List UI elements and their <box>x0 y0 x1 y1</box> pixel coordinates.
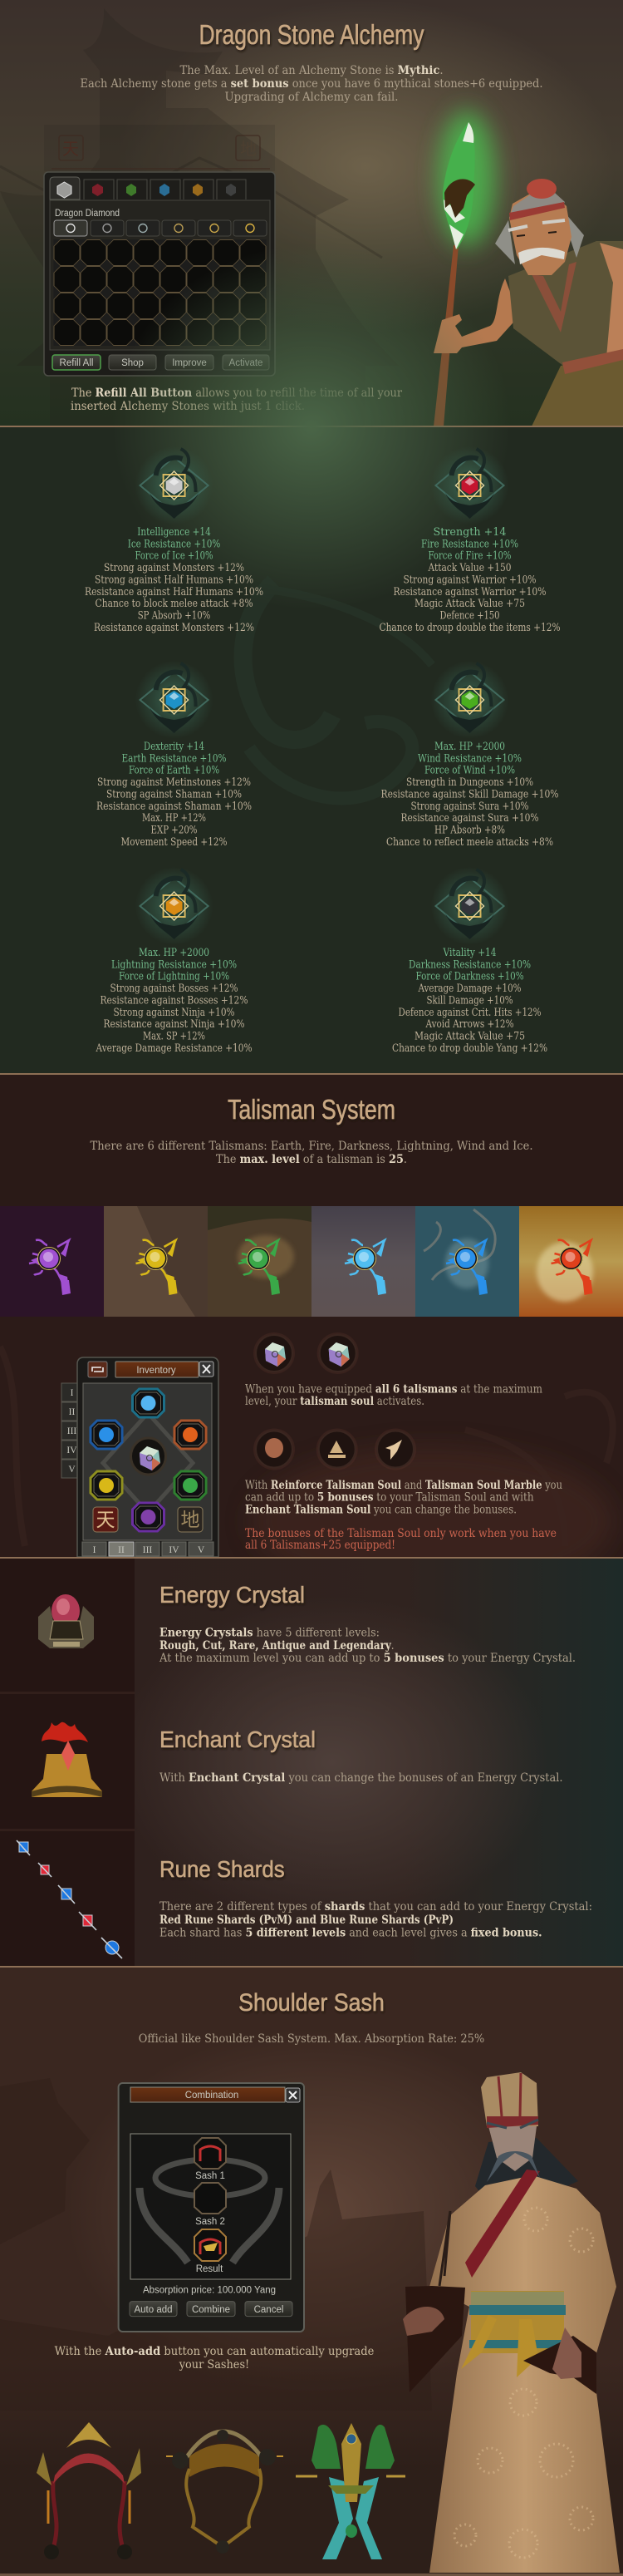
intro text: Each Alchemy stone gets a set bonus once you have 6 mythical stones+6 equipped. <box>80 77 543 91</box>
icon: green stone bonuses: Force of Wind +10% <box>424 764 515 776</box>
icon: black stone bonuses: Average Damage +10% <box>418 982 522 994</box>
energy crystal text: Energy Crystals have 5 different levels: <box>159 1626 380 1639</box>
talisman: ice <box>345 1240 386 1295</box>
icon: amber stone bonuses: Strong against Bosses +12% <box>110 982 238 994</box>
icon: black stone bonuses <box>392 867 547 1054</box>
reinforce text: With Reinforce Talisman Soul and Talisman Soul Marble you <box>245 1479 562 1492</box>
icon: green stone bonuses: Strong against Sura +10% <box>410 800 529 812</box>
icon: amber stone bonuses: Lightning Resistance +10% <box>111 958 237 970</box>
divider <box>0 1073 623 1075</box>
icon: amber stone bonuses: Strong against Ninja +10% <box>113 1006 235 1018</box>
icon: blue stone bonuses: Dexterity +14 <box>144 740 204 752</box>
icon: amber stone bonuses: Resistance against Ninja +10% <box>103 1017 245 1030</box>
alchemy window <box>44 125 275 376</box>
enchant text: With Enchant Crystal you can change the bonuses of an Energy Crystal. <box>159 1771 563 1785</box>
window buttons: Refill All <box>60 358 93 368</box>
icon: black stone bonuses: Vitality +14 <box>443 946 497 958</box>
icon: white stone bonuses: Strong against Half Humans +10% <box>95 574 253 585</box>
icon: red stone bonuses: Resistance against Warrior +10% <box>394 585 547 598</box>
refill text <box>71 387 403 413</box>
icon: energy crystal <box>38 1594 94 1648</box>
divider <box>0 1966 623 1968</box>
icon: red stone bonuses: Magic Attack Value +75 <box>415 597 525 609</box>
rune shards text <box>159 1900 592 1940</box>
window buttons: Improve <box>172 358 207 368</box>
stone name: Dragon Diamond <box>55 209 120 219</box>
price: Absorption price: 100.000 Yang <box>143 2286 276 2296</box>
character: old man with spear <box>434 111 623 426</box>
reinforce item icons <box>253 1428 416 1470</box>
title: Rune Shards <box>159 1856 285 1882</box>
icon: green stone bonuses: Resistance against Skill Damage +10% <box>380 788 559 800</box>
talisman strip <box>0 1206 623 1317</box>
window buttons: Cancel <box>254 2305 283 2315</box>
equipped talisman slots <box>91 1389 206 1532</box>
rune shards text: Red Rune Shards (PvM) and Blue Rune Shards (PvP) <box>159 1914 454 1927</box>
pagoda background <box>0 8 399 426</box>
combination window: Sash 1 <box>195 2171 225 2181</box>
icon: amber stone bonuses: Force of Lightning +10% <box>119 970 229 983</box>
side tabs: I <box>71 1388 74 1398</box>
combination window: Result <box>196 2264 223 2274</box>
soul text: level, your talisman soul activates. <box>245 1395 424 1408</box>
bottom tabs: V <box>198 1545 205 1555</box>
panel: talisman system <box>0 1075 623 1596</box>
reinforce text <box>245 1479 562 1516</box>
icon: white stone bonuses: Resistance against Monsters +12% <box>94 621 254 633</box>
icon: red stone bonuses: Fire Resistance +10% <box>421 537 518 549</box>
title: Enchant Crystal <box>159 1726 316 1752</box>
inventory window <box>61 1357 218 1557</box>
icon: black stone bonuses: Darkness Resistance +10% <box>409 958 531 970</box>
icon: white stone bonuses: Strong against Monsters +12% <box>104 561 244 574</box>
icon: green stone bonuses: Chance to reflect meele attacks +8% <box>386 835 553 848</box>
intro text: Official like Shoulder Sash System. Max. Absorption Rate: 25% <box>139 2032 484 2046</box>
title: Dragon Stone Alchemy <box>199 19 424 50</box>
icon: green stone bonuses: Wind Resistance +10% <box>418 751 522 764</box>
icon: green stone bonuses: Resistance against Sura +10% <box>400 811 539 824</box>
auto-add text: your Sashes! <box>179 2358 249 2372</box>
icon: amber stone bonuses <box>96 867 253 1054</box>
divider <box>0 1557 623 1559</box>
faint dragon <box>243 582 432 798</box>
icon: white stone bonuses: SP Absorb +10% <box>138 609 210 622</box>
window buttons <box>130 2302 292 2317</box>
rune shards text: There are 2 different types of shards that you can add to your Energy Crystal: <box>159 1900 592 1914</box>
icon: blue stone bonuses: Force of Earth +10% <box>129 764 219 776</box>
soul text <box>245 1383 542 1408</box>
icon: amber stone bonuses: Resistance against Bosses +12% <box>100 994 248 1006</box>
icon: red stone bonuses: Force of Fire +10% <box>429 549 512 562</box>
icon: red stone bonuses: Strong against Warrior +10% <box>404 574 537 585</box>
robe pattern spots <box>454 2208 593 2558</box>
wing emblem <box>140 2160 279 2263</box>
icon: blue stone bonuses: EXP +20% <box>151 824 198 836</box>
faded seal icons <box>52 135 270 169</box>
icon: rune shards <box>17 1840 122 1958</box>
icon: green stone bonuses: Strength in Dungeons +10% <box>406 776 533 788</box>
icon: green stone bonuses: HP Absorb +8% <box>434 824 505 836</box>
side tabs <box>61 1383 83 1478</box>
character: robed man <box>403 2072 620 2573</box>
combination window: Sash 2 <box>195 2217 225 2227</box>
equipped talisman slots: 天 <box>96 1504 115 1532</box>
icon: enchant crystal <box>32 1722 102 1797</box>
talisman soul icons <box>253 1332 359 1374</box>
icon: white stone bonuses: Intelligence +14 <box>137 525 211 538</box>
energy crystal text: Rough, Cut, Rare, Antique and Legendary. <box>159 1639 395 1652</box>
sash: teal and green <box>296 2423 405 2559</box>
grade buttons <box>54 220 267 236</box>
icon: white stone bonuses: Resistance against Half Humans +10% <box>85 585 263 598</box>
icon: blue stone bonuses: Strong against Shaman +10% <box>106 788 242 800</box>
intro text: There are 6 different Talismans: Earth, Fire, Darkness, Lightning, Wind and Ice. <box>90 1140 533 1153</box>
talisman: wind <box>238 1240 280 1295</box>
castle silhouette <box>0 2078 432 2411</box>
icon: white stone bonuses: Ice Resistance +10% <box>128 537 220 549</box>
bottom tabs: IV <box>169 1545 179 1555</box>
window buttons <box>52 355 269 370</box>
intro text <box>80 64 543 104</box>
icon: red stone bonuses: Attack Value +150 <box>428 561 512 574</box>
alchemy window: 地 <box>240 135 257 160</box>
title bar <box>130 2087 300 2102</box>
energy crystal text <box>159 1626 576 1665</box>
warning text: The bonuses of the Talisman Soul only work when you have <box>245 1527 557 1540</box>
title: Talisman System <box>228 1094 395 1125</box>
icon: red stone bonuses: Chance to droup double the items +12% <box>379 621 561 633</box>
bottom tabs: I <box>93 1545 96 1555</box>
title bar <box>88 1362 213 1377</box>
bottom tabs: III <box>143 1545 152 1555</box>
intro text: Upgrading of Alchemy can fail. <box>224 91 399 104</box>
icon: black stone bonuses: Defence against Crit. Hits +12% <box>399 1006 542 1018</box>
side tabs: V <box>68 1465 76 1475</box>
alchemy window: 天 <box>62 135 79 160</box>
icon: blue stone bonuses: Earth Resistance +10% <box>121 751 227 764</box>
bottom tabs <box>82 1542 213 1556</box>
bottom tabs: II <box>118 1545 125 1555</box>
auto-add text: With the Auto-add button you can automatically upgrade <box>55 2345 374 2358</box>
icon: red stone bonuses: Strength +14 <box>434 525 507 538</box>
side tabs: II <box>69 1407 75 1417</box>
panel: alchemy stone bonuses <box>0 244 623 1074</box>
icon: white stone bonuses <box>85 446 263 633</box>
talisman: lightning <box>446 1240 488 1295</box>
icon: blue stone bonuses <box>96 661 252 848</box>
warning text <box>245 1527 557 1552</box>
sash: red <box>37 2422 141 2559</box>
refill text: inserted Alchemy Stones with just 1 click. <box>71 400 305 413</box>
icon: black stone bonuses: Avoid Arrows +12% <box>425 1017 514 1030</box>
equipped talisman slots: 地 <box>181 1504 199 1532</box>
slot grid <box>53 239 266 346</box>
divider <box>0 426 623 427</box>
intro text: The Max. Level of an Alchemy Stone is Mythic. <box>179 64 444 77</box>
gem tabs <box>50 177 246 199</box>
window buttons: Shop <box>121 358 144 368</box>
icon: blue stone bonuses: Resistance against Shaman +10% <box>96 800 252 812</box>
side tabs: III <box>67 1426 76 1436</box>
reinforce text: can add up to 5 bonuses to your Talisman Soul and with <box>245 1491 534 1505</box>
title: Energy Crystal <box>159 1582 305 1608</box>
warning text: all 6 Talismans+25 equipped! <box>245 1539 395 1552</box>
icon: green stone bonuses <box>380 661 559 848</box>
refill text: The Refill All Button allows you to refill the time of all your <box>71 387 403 400</box>
faint swirl decorations <box>0 1347 613 1546</box>
icon: blue stone bonuses: Strong against Metinstones +12% <box>97 776 251 788</box>
icon: red stone bonuses: Defence +150 <box>440 609 500 622</box>
sash: golden <box>166 2430 283 2554</box>
icon: white stone bonuses: Force of Ice +10% <box>135 549 213 562</box>
auto-add text <box>55 2345 374 2372</box>
title bar: Inventory <box>136 1366 176 1376</box>
rune shards text: Each shard has 5 different levels and each level gives a fixed bonus. <box>159 1927 542 1940</box>
icon: black stone bonuses: Skill Damage +10% <box>427 994 513 1006</box>
icon: green stone bonuses: Max. HP +2000 <box>434 740 505 752</box>
panel: crystals and shards <box>0 1559 623 1966</box>
icon: amber stone bonuses: Max. SP +12% <box>143 1030 205 1042</box>
reinforce text: Enchant Talisman Soul you can change the bonuses. <box>245 1503 517 1516</box>
icon: amber stone bonuses: Average Damage Resistance +10% <box>96 1042 253 1054</box>
icon: blue stone bonuses: Max. HP +12% <box>142 811 206 824</box>
icon: amber stone bonuses: Max. HP +2000 <box>139 946 209 958</box>
side tabs: IV <box>66 1446 77 1455</box>
energy crystal text: At the maximum level you can add up to 5 bonuses to your Energy Crystal. <box>159 1652 576 1665</box>
soul text: When you have equipped all 6 talismans at the maximum <box>245 1383 542 1396</box>
window buttons: Auto add <box>134 2305 173 2315</box>
icon: black stone bonuses: Chance to drop double Yang +12% <box>392 1042 547 1054</box>
icon: white stone bonuses: Chance to block melee attack +8% <box>95 597 253 609</box>
combination window <box>119 2083 304 2332</box>
panel: shoulder sash <box>0 1968 623 2576</box>
talisman: fire <box>552 1240 593 1295</box>
divider <box>0 2574 623 2576</box>
window buttons: Activate <box>229 358 262 368</box>
icon: black stone bonuses: Magic Attack Value +75 <box>415 1030 525 1042</box>
intro text <box>90 1140 533 1166</box>
sash slots <box>194 2138 226 2261</box>
title bar: Combination <box>185 2091 238 2101</box>
talisman: earth <box>136 1240 178 1295</box>
window buttons: Combine <box>192 2305 230 2315</box>
icon: blue stone bonuses: Movement Speed +12% <box>121 835 228 848</box>
talisman: darkness <box>29 1240 71 1295</box>
icon: red stone bonuses <box>379 446 561 633</box>
intro text: The max. level of a talisman is 25. <box>216 1153 407 1166</box>
icon: black stone bonuses: Force of Darkness +10% <box>415 970 524 983</box>
title: Shoulder Sash <box>238 1989 385 2017</box>
